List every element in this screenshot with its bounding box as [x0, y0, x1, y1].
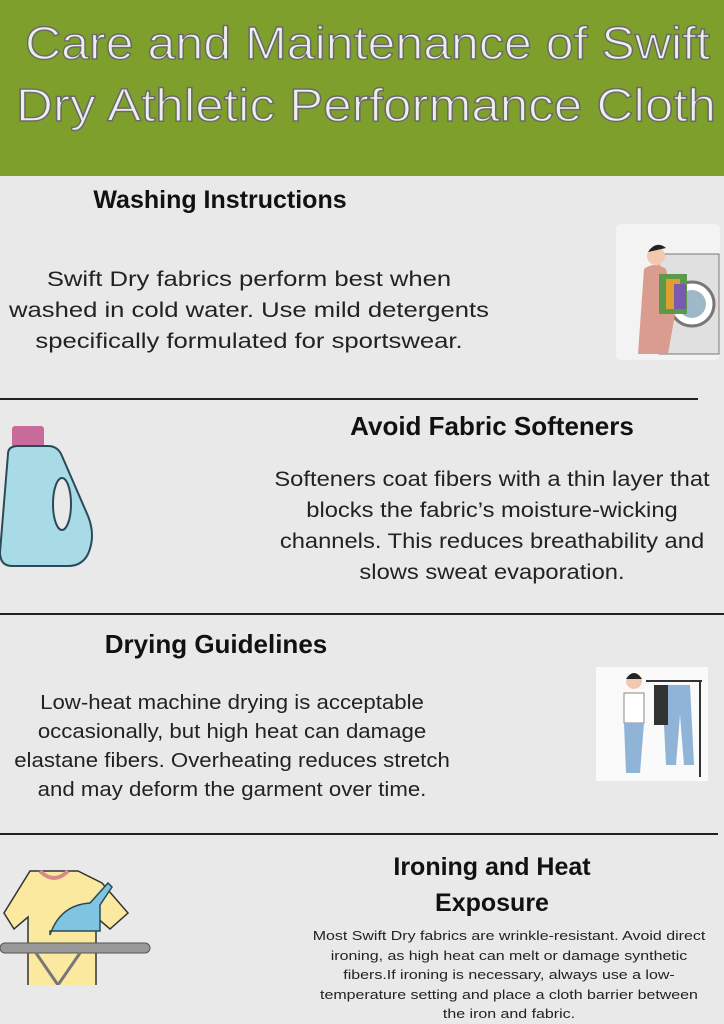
text: drying: and may deform the garment over time.	[38, 779, 426, 801]
text: ironing	[313, 928, 706, 1021]
icon: woman with clothes rack	[596, 667, 708, 781]
section: washing instructions	[9, 186, 720, 360]
section: ironing and heat exposure	[0, 853, 706, 1021]
heading: washing: Washing Instructions	[93, 186, 347, 214]
text: ironing: the iron and fabric.	[443, 1006, 575, 1021]
text: ironing: Most Swift Dry fabrics are wrinkle-resistant. Avoid direct	[313, 928, 705, 943]
heading: drying: Drying Guidelines	[105, 629, 327, 659]
text: drying	[14, 692, 450, 801]
text: softeners	[274, 468, 710, 584]
title banner	[0, 0, 724, 176]
section: avoid fabric softeners	[0, 411, 710, 584]
icon: detergent bottle	[0, 426, 93, 567]
heading: ironing: Ironing and Heat Exposure	[393, 853, 591, 917]
text: softeners: Softeners coat fibers with a thin layer that	[274, 468, 710, 491]
text: softeners: blocks the fabric’s moisture-wicking	[306, 499, 678, 522]
heading: softeners: Avoid Fabric Softeners	[350, 411, 634, 441]
icon: shirt with iron	[0, 870, 150, 985]
text: washing: specifically formulated for sportswear.	[35, 330, 463, 353]
title text: Care and Maintenance of Swift	[25, 17, 710, 69]
text: drying: Low-heat machine drying is acceptable	[40, 692, 424, 714]
text: ironing: temperature setting and place a cloth barrier between	[320, 986, 698, 1002]
section: drying guidelines	[14, 629, 708, 801]
text: washing: washed in cold water. Use mild detergents	[9, 299, 489, 322]
text: drying: occasionally, but high heat can damage	[38, 721, 426, 743]
text: washing	[9, 268, 489, 353]
title text	[16, 17, 716, 131]
text: washing: Swift Dry fabrics perform best when	[47, 268, 451, 291]
text: ironing: ironing, as high heat can melt or damage synthetic	[331, 948, 687, 962]
text: drying: elastane fibers. Overheating reduces stretch	[14, 750, 450, 772]
text: softeners: slows sweat evaporation.	[359, 561, 625, 584]
title text: Dry Athletic Performance Cloth	[16, 79, 716, 131]
text: ironing: fibers.If ironing is necessary, always use a low-	[343, 967, 675, 982]
text: softeners: channels. This reduces breathability and	[280, 530, 704, 553]
icon: woman at washing machine	[616, 224, 720, 360]
